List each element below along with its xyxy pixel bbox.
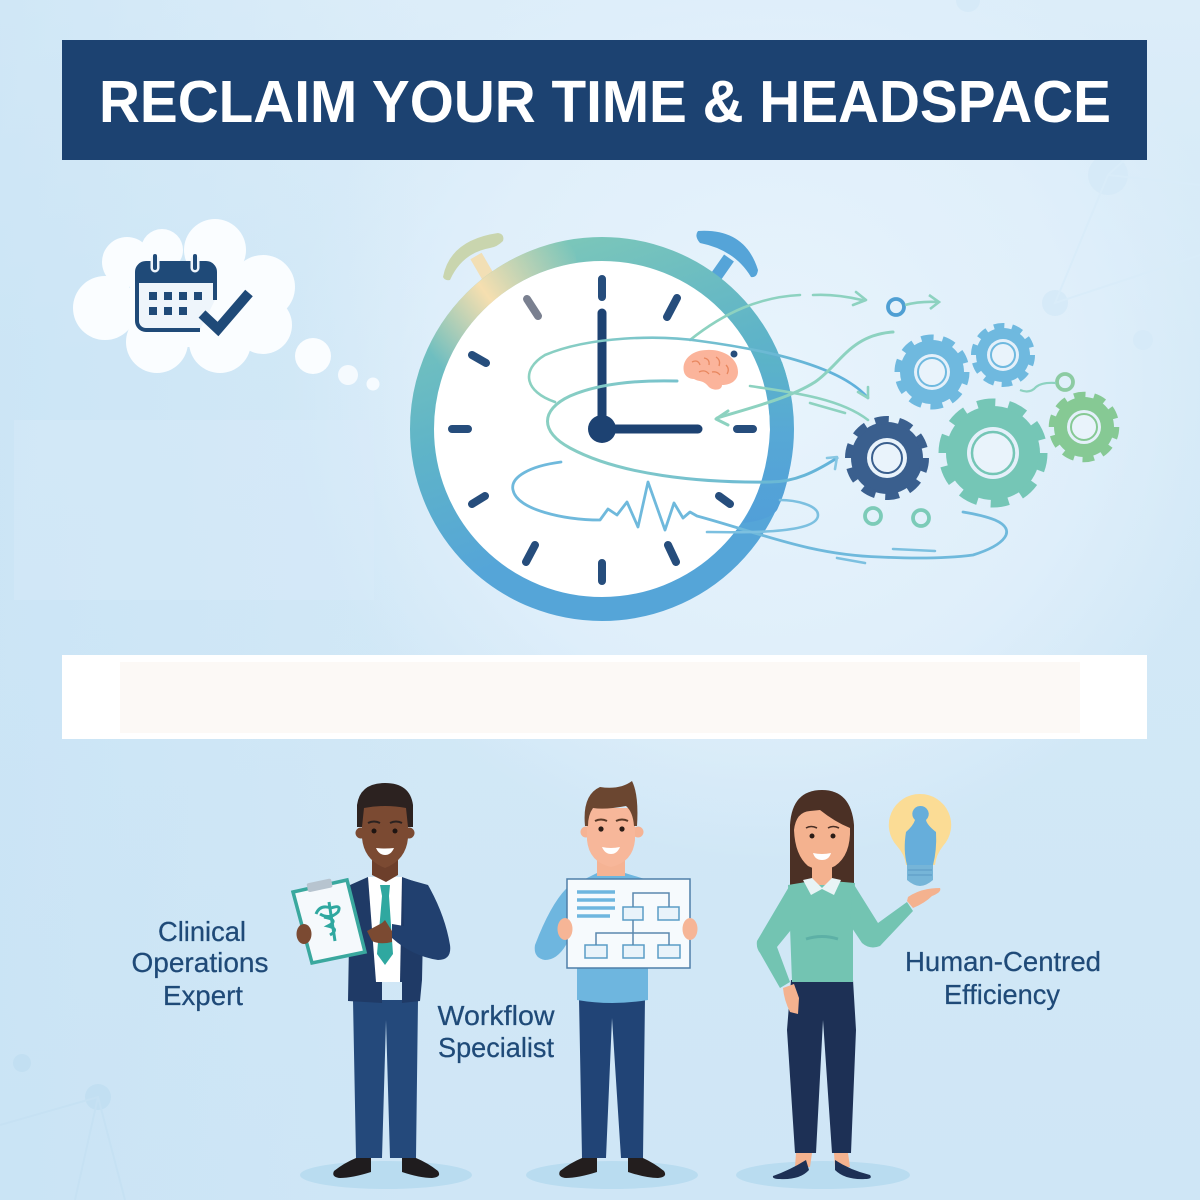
head bbox=[356, 783, 414, 868]
clock ticks bbox=[452, 279, 753, 581]
person: human-centred efficiency bbox=[736, 790, 951, 1189]
gear: small blue bbox=[974, 326, 1032, 384]
white banner bbox=[62, 655, 1147, 739]
gear: green bbox=[1052, 395, 1116, 459]
label: human-centred efficiency bbox=[905, 946, 1101, 1010]
title banner bbox=[62, 40, 1147, 160]
label: human-centred efficiency: Efficiency bbox=[944, 979, 1060, 1010]
label: clinical operations expert bbox=[132, 916, 268, 1011]
face bbox=[794, 810, 850, 870]
trousers bbox=[353, 1000, 418, 1158]
trousers bbox=[787, 980, 856, 1153]
gear: light blue bbox=[898, 338, 966, 406]
label: clinical operations expert: Clinical bbox=[158, 916, 246, 947]
icon: light bulb bbox=[889, 794, 951, 886]
person: clinical operations expert bbox=[293, 783, 472, 1189]
gears bbox=[849, 295, 1116, 526]
hands bbox=[783, 888, 940, 1014]
head bbox=[580, 781, 644, 867]
neck bbox=[597, 855, 625, 876]
label: clinical operations expert: Operations bbox=[132, 947, 268, 978]
sweater bbox=[577, 873, 648, 1003]
flow arrows bbox=[513, 292, 1007, 563]
gear: dark blue bbox=[849, 420, 925, 496]
shoes bbox=[333, 1158, 439, 1178]
clock hands bbox=[588, 313, 698, 443]
icon: brain bbox=[684, 350, 738, 390]
neck bbox=[372, 860, 398, 882]
hands bbox=[296, 920, 392, 944]
tie bbox=[377, 885, 393, 965]
clock knobs bbox=[443, 231, 758, 280]
trousers bbox=[579, 998, 645, 1158]
shirt bbox=[368, 877, 402, 982]
clock bbox=[422, 231, 793, 609]
icon: calendar bbox=[137, 256, 215, 330]
label: workflow specialist bbox=[438, 1000, 555, 1063]
board bbox=[567, 879, 690, 968]
small rings bbox=[865, 295, 1073, 526]
icon: check mark bbox=[202, 293, 249, 329]
ankles and shoes bbox=[795, 1153, 850, 1167]
hands bbox=[558, 918, 698, 940]
clipboard bbox=[293, 878, 365, 963]
person: workflow specialist bbox=[526, 781, 698, 1189]
arm bbox=[392, 878, 450, 960]
neck and collar bbox=[812, 860, 832, 885]
label: workflow specialist: Workflow bbox=[438, 1000, 555, 1031]
label: clinical operations expert: Expert bbox=[163, 980, 243, 1011]
thought cloud with calendar bbox=[73, 219, 380, 390]
jacket bbox=[348, 877, 424, 1003]
label: human-centred efficiency: Human-Centred bbox=[905, 946, 1101, 977]
title: RECLAIM YOUR TIME & HEADSPACE bbox=[99, 69, 1111, 135]
shoes bbox=[559, 1158, 665, 1178]
label: workflow specialist: Specialist bbox=[438, 1032, 554, 1063]
gear: large teal bbox=[943, 403, 1043, 503]
hair bbox=[790, 790, 854, 885]
sweater bbox=[788, 881, 855, 982]
